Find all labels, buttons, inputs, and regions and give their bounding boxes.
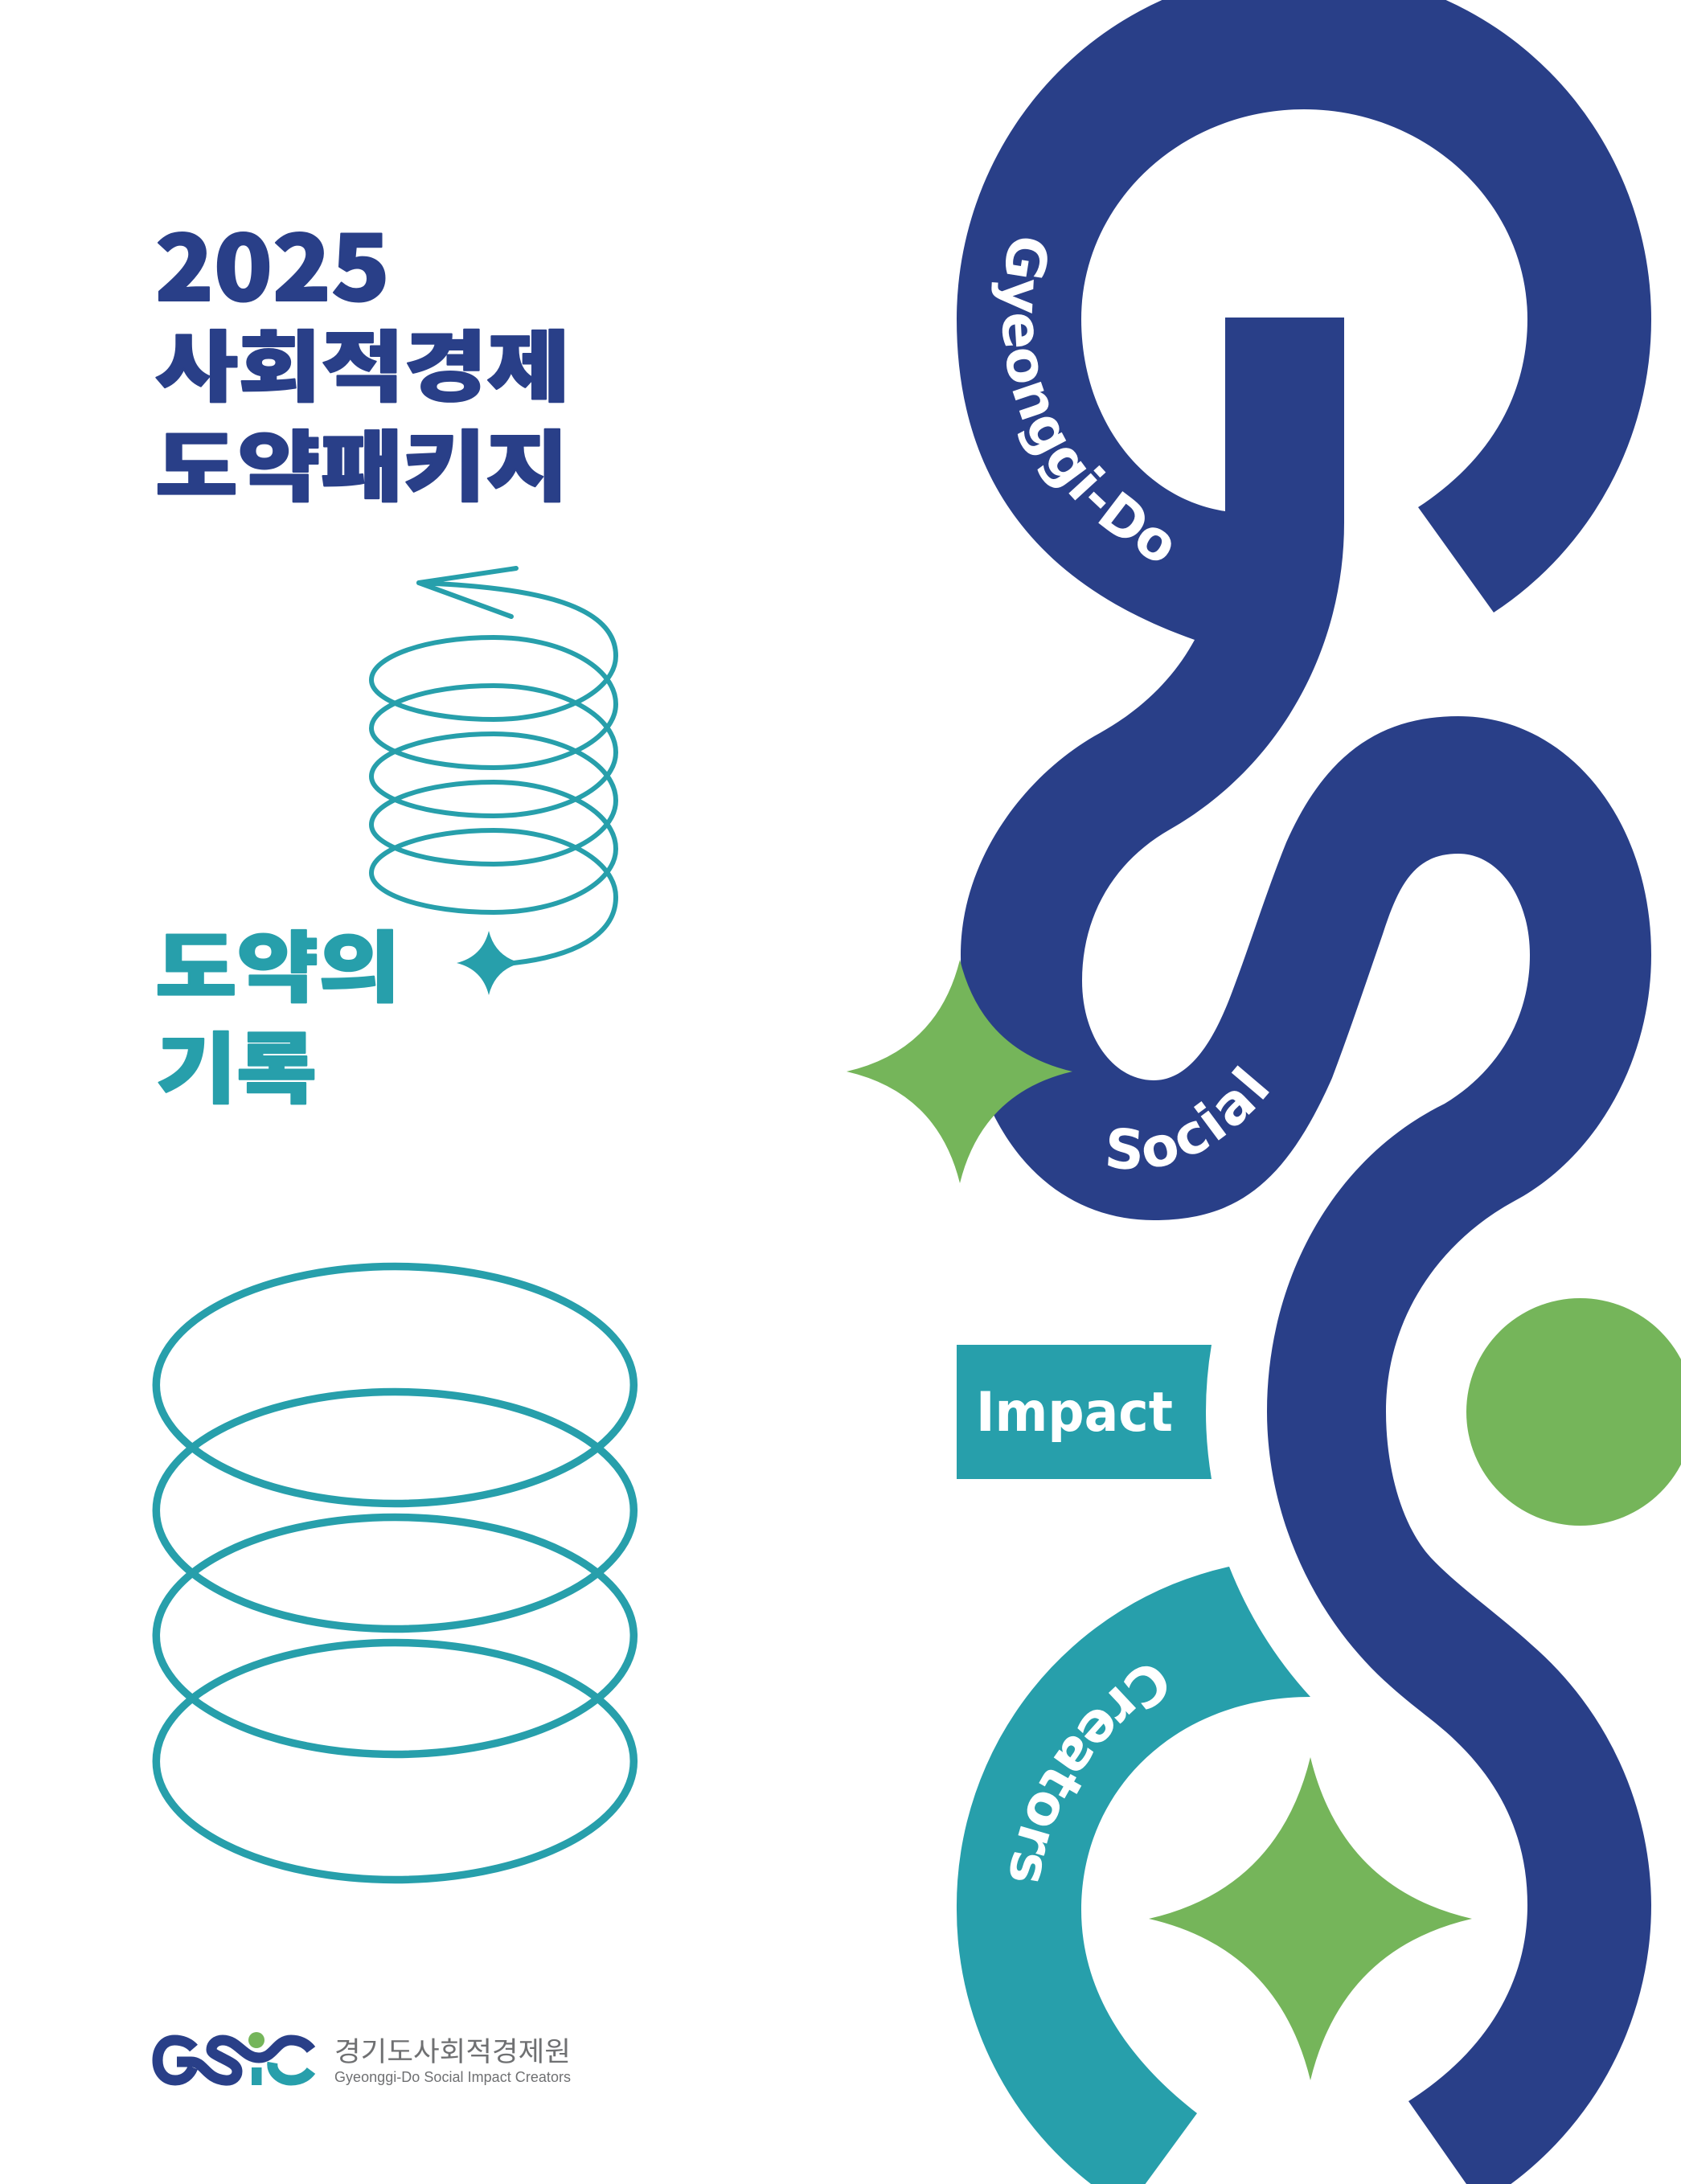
teal C arc [957, 1567, 1310, 2184]
subtitle: 기록 [156, 1007, 317, 1119]
logo text: English name: Gyeonggi-Do Social Impact Creators [334, 2069, 571, 2085]
green star: large [1149, 1757, 1472, 2080]
icon: small spiral with arrow and star [371, 568, 616, 995]
logo text: Korean name: 경기도사회적경제원 [334, 2037, 571, 2067]
title [155, 197, 570, 517]
subtitle [155, 906, 400, 1119]
label: Social: Social [1108, 1065, 1269, 1170]
title: 도약패키지 [155, 405, 568, 517]
label: Impact: Impact [976, 1381, 1173, 1444]
panel: Impact [957, 1345, 1212, 1479]
small star [457, 931, 521, 995]
logo mark [158, 2040, 311, 2080]
subtitle: 도약의 [155, 906, 400, 1018]
large G and S ribbon [957, 0, 1651, 2184]
green star: left [847, 960, 1072, 1183]
arrow head [419, 568, 516, 617]
icon: large coil rings [156, 1267, 633, 1879]
spiral line [371, 583, 616, 963]
label: Creators: Creators [1010, 1666, 1166, 1881]
title: 2025 [155, 197, 390, 327]
title: 사회적경제 [155, 305, 570, 417]
green circle [1466, 1298, 1681, 1526]
logo: GSIC [158, 2032, 571, 2085]
label: Gyeonggi-Do: Gyeonggi-Do [991, 238, 1171, 561]
